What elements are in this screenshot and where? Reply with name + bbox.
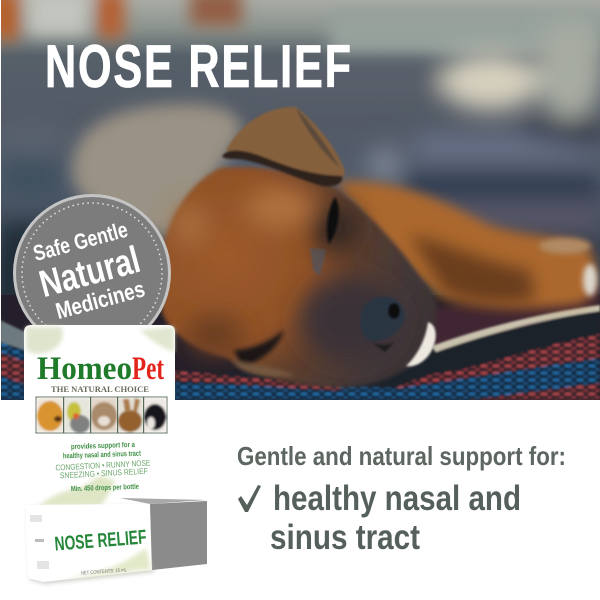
benefit with check mark: healthy nasal and bbox=[273, 479, 521, 518]
box description text: CONGESTION • RUNNY NOSE bbox=[55, 459, 151, 472]
box description text: healthy nasal and sinus tract bbox=[63, 449, 141, 460]
box description text bbox=[55, 440, 151, 493]
badge: Safe Gentle Natural Medicines: Natural bbox=[35, 239, 145, 306]
benefit with check mark bbox=[238, 479, 521, 557]
box description text: Min. 450 drops per bottle bbox=[71, 482, 139, 493]
puppy eye bbox=[310, 197, 339, 276]
brand logo: Homeo bbox=[37, 351, 132, 387]
box description text: SNEEZING • SINUS RELIEF bbox=[60, 467, 148, 480]
badge: Safe Gentle Natural Medicines bbox=[13, 194, 171, 352]
box back panel bbox=[24, 325, 175, 510]
animal photo strip bbox=[36, 397, 167, 433]
icon: check mark bbox=[238, 485, 261, 512]
puppy nose and muzzle bbox=[360, 296, 436, 366]
tagline: THE NATURAL CHOICE bbox=[51, 385, 150, 394]
benefit with check mark: sinus tract bbox=[270, 518, 420, 557]
box lower carton: NET CONTENTS: 15 mL bbox=[81, 567, 127, 577]
badge: Safe Gentle Natural Medicines: Safe Gentle bbox=[31, 218, 131, 267]
box lower carton bbox=[25, 498, 207, 584]
box lower carton: NOSE RELIEF bbox=[54, 526, 147, 556]
badge: Safe Gentle Natural Medicines: Medicines bbox=[53, 277, 148, 325]
back of puppy, out of focus bbox=[72, 104, 241, 240]
blanket bbox=[0, 295, 600, 400]
photo: sleeping puppy on blanket bbox=[0, 0, 600, 400]
puppy head bbox=[159, 167, 437, 388]
brand logo: Pet bbox=[132, 351, 164, 387]
puppy body and paw bbox=[335, 181, 596, 308]
box description text: provides support for a bbox=[71, 440, 136, 451]
puppy ear bbox=[222, 107, 345, 186]
product box bbox=[24, 325, 207, 584]
title: NOSE RELIEF bbox=[45, 34, 353, 101]
